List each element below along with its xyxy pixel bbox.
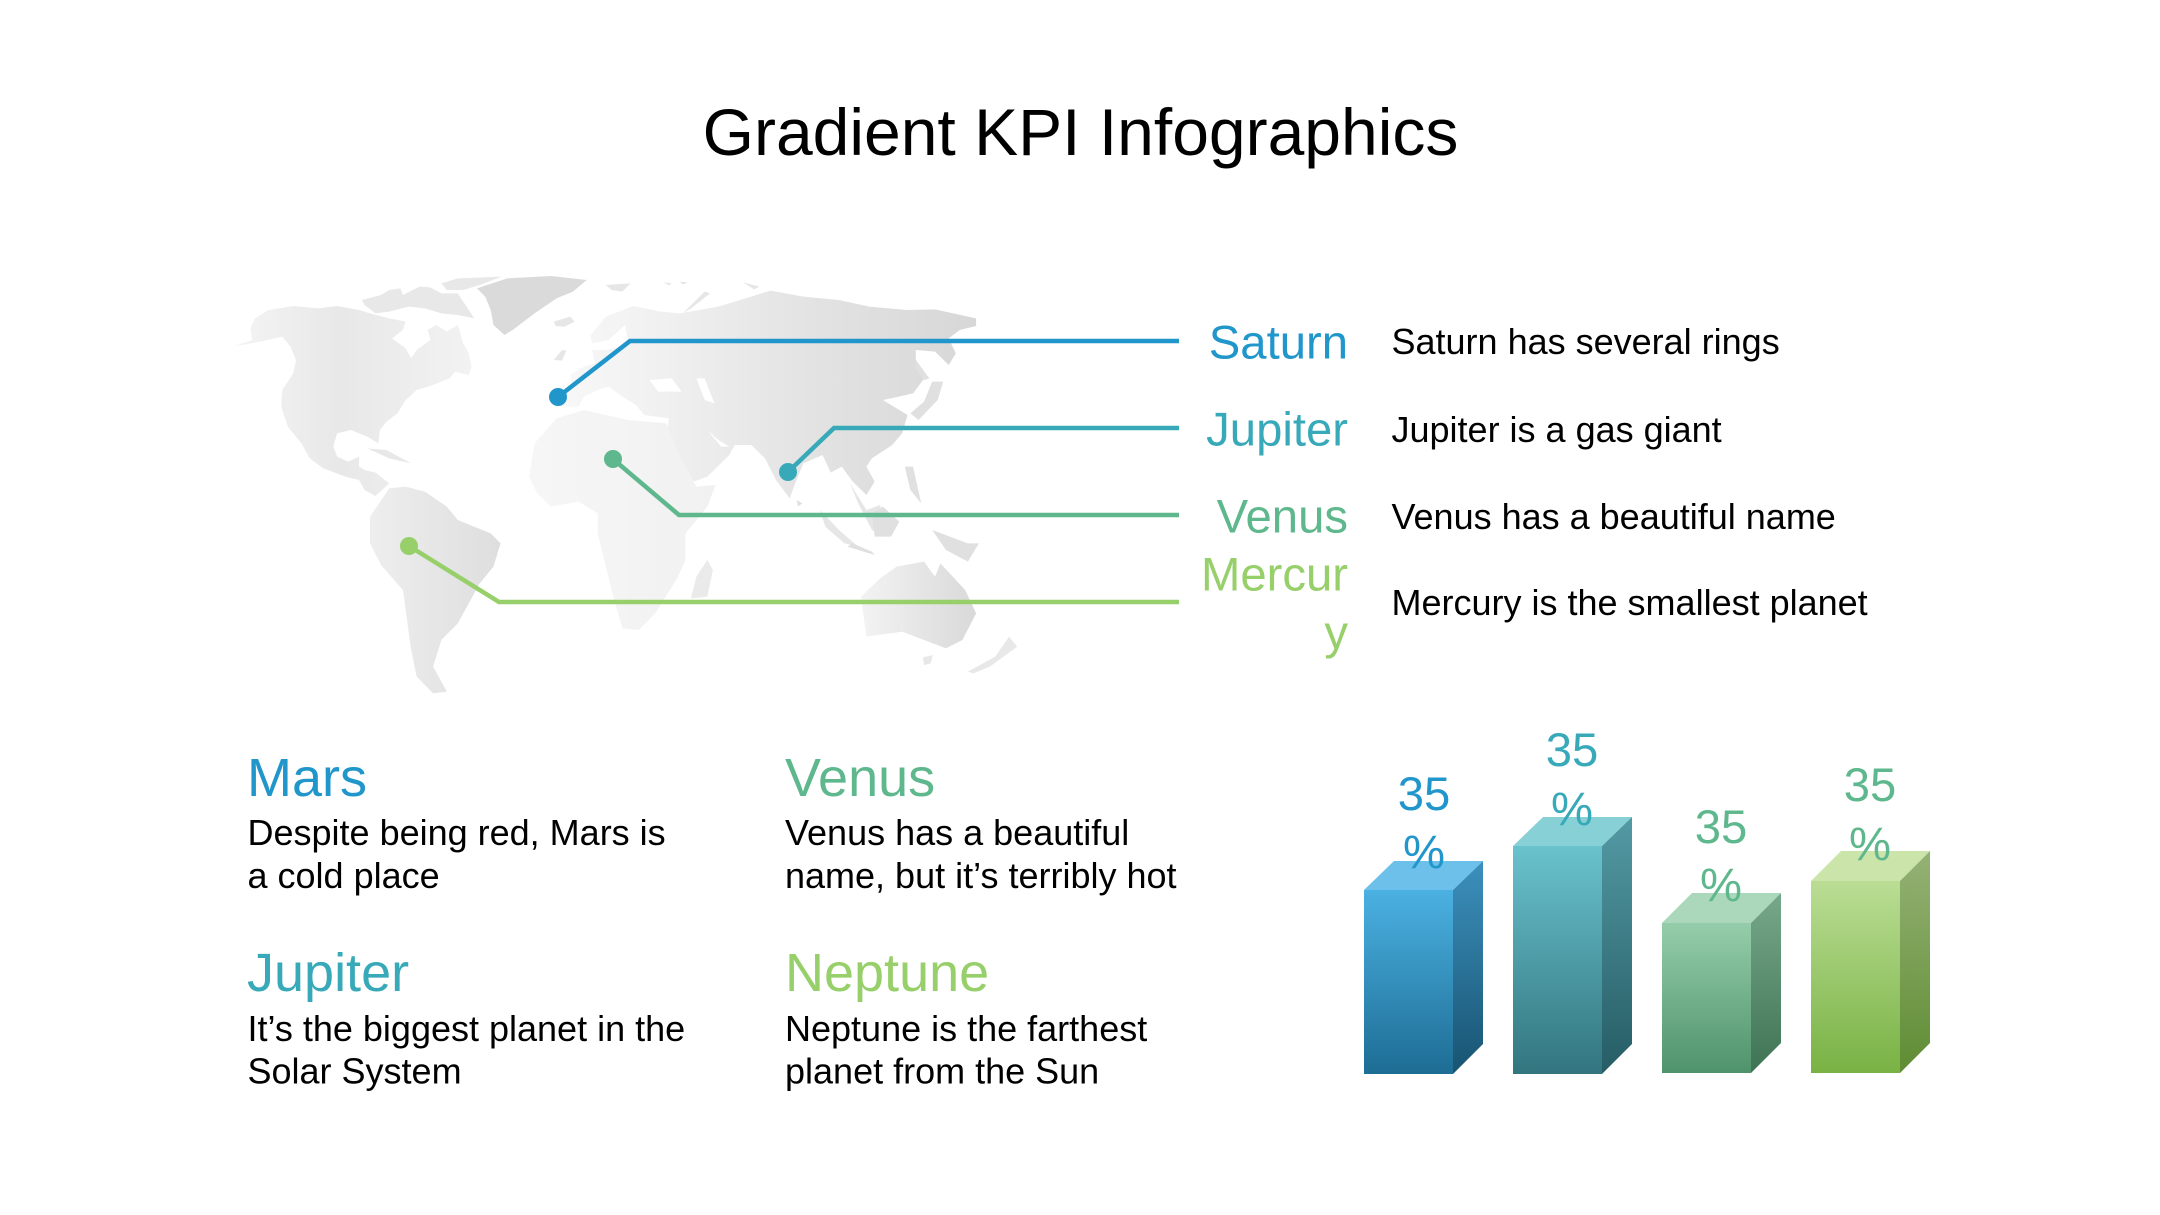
- block: jupiter: It’s the biggest planet in the: [248, 1008, 685, 1049]
- value: bar 2: %: [1551, 783, 1593, 836]
- eurasia: [559, 291, 976, 498]
- bar 4: [1811, 851, 1930, 1073]
- bar 1: [1364, 861, 1483, 1074]
- block: neptune: Neptune: [785, 943, 989, 1003]
- block: venus: name, but it’s terribly hot: [785, 855, 1177, 896]
- block: jupiter: Solar System: [248, 1050, 462, 1092]
- value: bar 2: 35: [1546, 724, 1598, 777]
- block: mars: [247, 748, 666, 896]
- connector: mercury: [400, 537, 1179, 602]
- block: neptune: [785, 943, 1147, 1092]
- value: bar 1: %: [1403, 826, 1445, 879]
- value: bar 4: 35: [1844, 759, 1896, 812]
- asian islands: [797, 362, 979, 562]
- arctic islands: [362, 277, 502, 318]
- title: Gradient KPI Infographics: [703, 95, 1458, 169]
- iceland, svalbard and uk: [554, 282, 759, 361]
- australia: [861, 562, 976, 648]
- connector: jupiter: [779, 428, 1179, 481]
- description: mercury: Mercury is the smallest planet: [1392, 582, 1868, 623]
- value: bar 1: 35: [1398, 768, 1450, 821]
- block: venus: Venus has a beautiful: [785, 812, 1129, 853]
- value: bar 4: %: [1849, 818, 1891, 871]
- label: saturn: Saturn: [1209, 316, 1348, 370]
- label: jupiter: Jupiter: [1206, 404, 1348, 456]
- block: neptune: Neptune is the farthest: [785, 1008, 1147, 1049]
- value: bar 3: %: [1700, 859, 1742, 912]
- block: mars: Mars: [247, 748, 367, 808]
- block: venus: [785, 748, 1177, 896]
- north america: [233, 306, 472, 496]
- malay peninsula and sumatra: [820, 483, 886, 547]
- block: neptune: planet from the Sun: [785, 1050, 1099, 1092]
- description: jupiter: Jupiter is a gas giant: [1392, 409, 1722, 450]
- block: venus: Venus: [785, 748, 935, 808]
- description: saturn: Saturn has several rings: [1392, 321, 1780, 362]
- world map: [233, 276, 1017, 693]
- connector: saturn: [549, 341, 1179, 406]
- block: jupiter: [247, 943, 685, 1092]
- bar 3: [1662, 893, 1781, 1073]
- value: bar 3: 35: [1695, 801, 1747, 854]
- block: mars: Despite being red, Mars is: [248, 812, 666, 853]
- label: venus: Venus: [1217, 490, 1348, 544]
- label: mercury: y: [1324, 606, 1348, 660]
- description: venus: Venus has a beautiful name: [1392, 496, 1836, 537]
- caribbean: [367, 448, 411, 463]
- inland seas: [600, 378, 729, 447]
- new zealand and tasmania: [923, 637, 1017, 673]
- 3d bar chart: [1364, 817, 1930, 1074]
- connector: venus: [604, 450, 1179, 515]
- africa: [529, 410, 716, 630]
- block: jupiter: Jupiter: [247, 943, 409, 1003]
- bar 2: [1513, 817, 1632, 1074]
- greenland: [477, 276, 587, 335]
- south america: [370, 487, 501, 693]
- label: mercury: Mercur: [1201, 548, 1348, 602]
- madagascar: [691, 560, 713, 598]
- block: mars: a cold place: [248, 855, 440, 896]
